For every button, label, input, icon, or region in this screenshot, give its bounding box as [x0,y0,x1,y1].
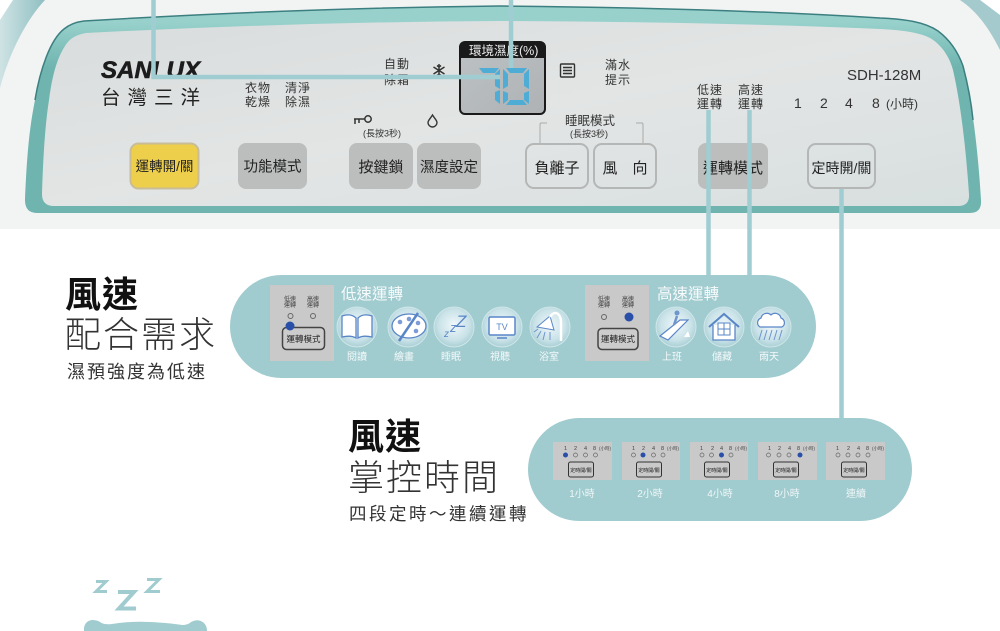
heading: timer control [348,416,529,524]
brand logo [101,57,207,109]
function labels: 運轉 [697,96,723,111]
button: ion [526,144,588,188]
high speed activity labels: 雨天 [759,352,779,363]
function labels [245,57,764,111]
high speed activity labels: 儲藏 [712,351,732,363]
icon: sleeping: z [449,320,457,335]
high speed control panel: 運轉 [598,301,610,309]
heading: wind speed matches needs: 濕預強度為低速 [67,362,207,382]
low speed activity labels: 繪畫 [394,350,414,363]
timer setting: continuous [826,442,885,480]
icon: reading [337,307,377,347]
icon: television [482,307,522,347]
heading: timer control: 四段定時～連續運轉 [349,504,529,524]
connector lines [154,0,842,419]
low speed control panel: 高速 [307,295,319,303]
low speed control panel: 運轉 [307,301,319,309]
timer hour labels [794,95,918,111]
button: run mode: 運轉模式 [703,160,763,177]
low speed title: 低速運轉 [341,285,403,303]
heading: timer control: 風速 [348,416,422,457]
high speed control panel: 運轉 [622,301,634,309]
function labels: 自動 [384,57,410,71]
high speed activity labels: 上班 [662,351,682,363]
high speed control panel: 運轉模式 [601,334,635,344]
icon: television: TV [496,322,508,332]
timer setting: continuous: 定時開/關 [843,467,865,474]
button: power [130,144,198,188]
timer hour labels: (小時) [886,97,918,111]
heading: wind speed matches needs [65,274,217,382]
timer setting: continuous: 1248 [836,446,869,452]
button: power: 運轉開/關 [136,159,193,174]
long press label: (長按3秒) [363,128,401,138]
timer setting: 4 hours: 1248 [700,446,732,452]
timer setting: 2 hours: (小時) [667,445,679,452]
function labels: 提示 [605,72,631,87]
button: key lock [349,143,413,189]
button: run mode [698,143,768,189]
timer setting: 1 hour: 定時開/關 [570,467,592,474]
timer setting: 4 hours: 定時開/關 [706,467,728,474]
low speed activity labels: 視聽 [490,350,510,363]
timer hour labels: 1 [794,95,802,111]
timer setting: 1 hour: 1248 [564,446,596,452]
timer setting: 4 hours [690,442,748,480]
icon: sleeping [434,307,474,347]
timer labels [569,487,866,500]
function labels: 低速 [697,82,723,97]
high speed control panel [585,285,649,361]
function labels: 清淨 [285,81,311,95]
low speed activity labels: 閱讀 [347,350,367,363]
button: function mode: 功能模式 [244,158,302,176]
function labels: 滿水 [605,58,631,72]
timer hour labels: 8 [872,95,880,111]
low speed activity labels: 浴室 [539,350,559,363]
function labels: 高速 [738,82,764,97]
timer setting: 8 hours: 1248 [768,446,800,452]
function labels: 除霜 [384,72,410,87]
high speed control panel: 低速 [598,295,610,303]
high speed activity labels [662,351,779,363]
icon: water tank [560,64,574,77]
timer setting: 8 hours [758,442,817,480]
sleep mode label: (長按3秒) [570,128,608,139]
timer labels: 連續 [846,487,866,500]
brand logo: SANLUX [101,57,202,84]
timer labels: 2小時 [637,488,663,500]
sleep mode label: 睡眠模式 [565,114,616,128]
timer setting: continuous: (小時) [872,445,884,452]
timer labels: 1小時 [569,488,595,500]
icon: sleeping: z [443,329,449,340]
button: humidity setting: 濕度設定 [420,159,478,176]
model number: SDH-128M [847,67,921,84]
timer setting: 1 hour: (小時) [599,445,611,452]
icon: water drop [428,115,437,127]
icon: commuting [656,307,696,347]
timer setting: 2 hours [622,442,680,480]
icon: shower [530,307,570,347]
icon: rainy day [751,307,791,347]
button: timer [808,144,875,188]
icon: painting [388,307,428,347]
button: key lock: 按鍵鎖 [358,159,404,176]
high speed control panel: 高速 [622,295,634,303]
button: function mode [238,143,307,189]
button: wind direction [594,144,656,188]
function labels: 運轉 [738,96,764,111]
function labels: 除濕 [285,94,311,109]
icon: storage [704,307,744,347]
timer setting: 2 hours: 定時開/關 [638,467,660,474]
timer setting: 2 hours: 1248 [632,446,664,452]
low speed activity labels: 睡眠 [441,350,461,363]
timer setting: 4 hours: (小時) [735,445,747,452]
icon: sleeping: Z [455,312,467,331]
timer setting: 1 hour [553,442,612,480]
heading: wind speed matches needs: 配合需求 [65,314,217,355]
timer hour labels: 4 [845,95,853,111]
high speed title: 高速運轉 [657,285,719,303]
sleep mode label [540,114,643,143]
icon: key lock [354,116,371,124]
button: wind direction: 風 向 [602,160,648,177]
low speed control panel: 運轉模式 [286,334,321,344]
button: timer: 定時開/關 [812,160,871,176]
icon: snowflake [434,64,444,77]
timer hour labels: 2 [820,95,828,111]
timer labels: 4小時 [707,488,733,500]
panel: timer settings [528,418,912,521]
low speed activity labels [347,350,559,363]
function labels: 乾燥 [245,95,271,109]
heading: wind speed matches needs: 風速 [65,274,139,315]
low speed control panel [270,285,334,361]
humidity display [460,42,545,114]
low speed control panel: 運轉 [284,301,296,309]
low speed control panel: 低速 [284,295,296,303]
button: ion: 負離子 [534,159,580,177]
timer setting: 8 hours: 定時開/關 [775,467,797,474]
brand logo: 台灣三洋 [101,87,207,109]
button: humidity setting [417,143,481,189]
icon: sleeping pillow [84,620,207,631]
panel: low and high speed [230,275,816,378]
timer setting: 8 hours: (小時) [803,445,815,452]
heading: timer control: 掌控時間 [348,457,500,498]
digit 7 and 0 [479,68,529,105]
humidity display: 環境濕度(%) [469,43,538,58]
function labels: 衣物 [245,80,271,95]
icon: sleep zzz [96,580,160,608]
timer labels: 8小時 [774,488,800,500]
dehumidifier control panel [0,0,1000,229]
